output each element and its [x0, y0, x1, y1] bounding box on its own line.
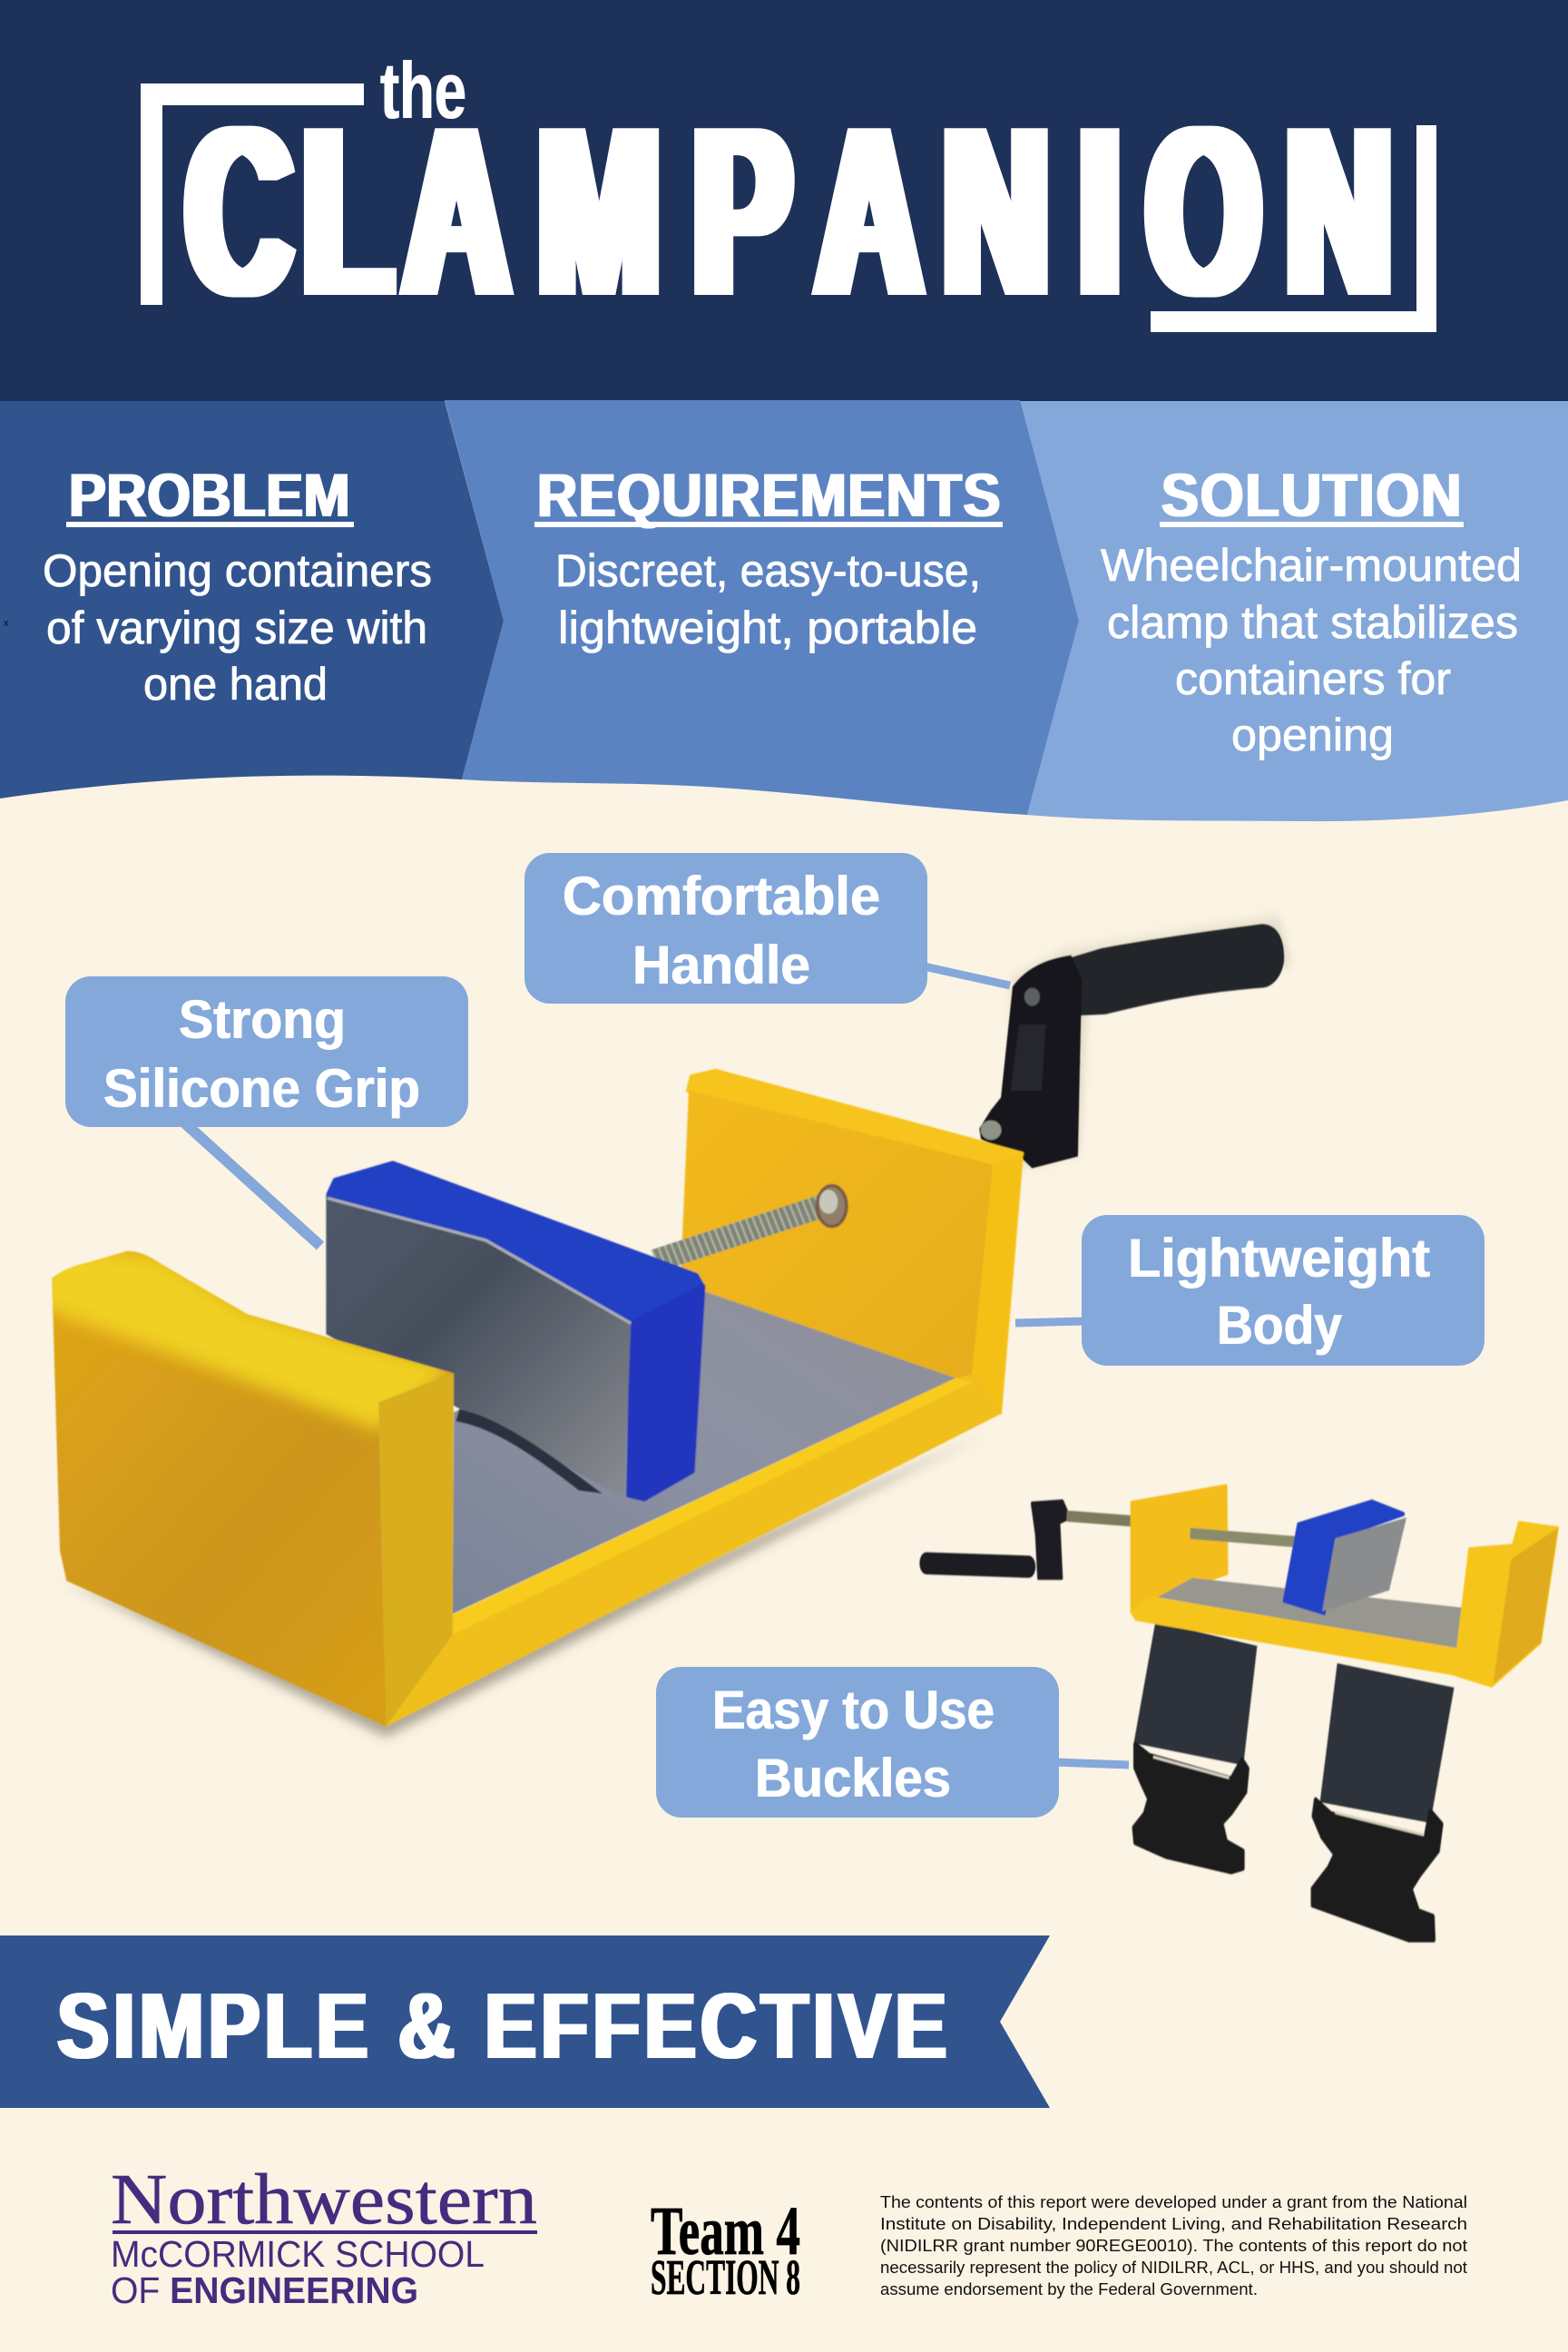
title: Clampanion: CLAMPANION — [187, 76, 1391, 347]
logo: northwestern mccormick: OF ENGINEERING — [111, 2269, 418, 2311]
callout: strong silicone grip: Strong — [179, 989, 346, 1050]
photo: clamp with buckles — [926, 1486, 1558, 1939]
small handle — [926, 1502, 1131, 1578]
logo: northwestern mccormick: Northwestern — [111, 2161, 537, 2239]
heading: solution: SOLUTION — [1161, 460, 1461, 530]
disclaimer: necessarily represent the policy of NIDILRR, ACL, or HHS, and you should not — [880, 2259, 1467, 2277]
photo: main clamp — [26, 1072, 1024, 1738]
disclaimer: Institute on Disability, Independent Living, and Rehabilitation Research — [880, 2215, 1467, 2233]
callout: lightweight body: Lightweight — [1128, 1228, 1430, 1289]
logo: northwestern mccormick: McCORMICK SCHOOL — [111, 2233, 485, 2275]
callout: easy to use buckles — [656, 1667, 1059, 1818]
heading: problem: PROBLEM — [69, 460, 350, 530]
problem text: one hand — [143, 659, 328, 710]
callout: easy to use buckles: Easy to Use — [712, 1680, 995, 1740]
disclaimer — [880, 2193, 1467, 2298]
title — [141, 47, 1436, 347]
connector: body — [1015, 1321, 1084, 1323]
connector: silicone grip — [185, 1123, 320, 1246]
title: the: the — [380, 47, 466, 136]
clamp near wall — [51, 1250, 456, 1727]
solution text: opening — [1231, 710, 1394, 760]
solution text: Wheelchair-mounted — [1101, 540, 1522, 591]
team label: SECTION 8 — [651, 2249, 800, 2305]
callout: lightweight body: Body — [1217, 1295, 1343, 1356]
small grip block — [1284, 1502, 1406, 1613]
header band — [0, 0, 1568, 401]
small far wall — [1132, 1486, 1227, 1612]
requirements text: lightweight, portable — [558, 603, 977, 653]
straps — [1134, 1622, 1454, 1823]
requirements text — [555, 545, 981, 653]
clamp far wall — [679, 1072, 1024, 1416]
problem text — [43, 545, 432, 710]
disclaimer: The contents of this report were developed under a grant from the National — [880, 2193, 1467, 2211]
callout: comfortable handle — [524, 853, 927, 1004]
title bracket: top left — [141, 83, 364, 305]
connector: handle — [924, 966, 1010, 985]
banner: simple and effective: SIMPLE & EFFECTIVE — [57, 1975, 946, 2079]
disclaimer: (NIDILRR grant number 90REGE0010). The contents of this report do not — [880, 2237, 1467, 2255]
threaded rod — [655, 1186, 847, 1260]
stray mark: x — [4, 618, 9, 629]
small floor — [1158, 1578, 1463, 1650]
disclaimer: assume endorsement by the Federal Government. — [880, 2280, 1258, 2298]
solution text: clamp that stabilizes — [1107, 597, 1518, 648]
connector: buckles — [1054, 1762, 1129, 1765]
photo: clamp handle — [979, 917, 1292, 1169]
clamp front base — [373, 1373, 1002, 1727]
panel: requirements — [445, 400, 1079, 815]
team label — [651, 2193, 800, 2305]
callout: easy to use buckles: Buckles — [755, 1748, 951, 1808]
heading: requirements: REQUIREMENTS — [537, 460, 1000, 530]
small rod — [1191, 1534, 1296, 1542]
logo: northwestern mccormick — [111, 2161, 537, 2311]
title bracket: bottom right — [1151, 125, 1436, 332]
shadow — [64, 1421, 1008, 1738]
solution text — [1101, 540, 1522, 760]
callout: lightweight body — [1082, 1215, 1485, 1366]
panel: problem — [0, 401, 504, 799]
callout: strong silicone grip — [65, 976, 468, 1127]
buckles — [1134, 1744, 1442, 1939]
callout: comfortable handle: Handle — [632, 935, 810, 995]
problem text: Opening containers — [43, 545, 432, 596]
requirements text: Discreet, easy-to-use, — [555, 545, 981, 596]
problem text: of varying size with — [46, 603, 427, 653]
silicone grip block — [326, 1163, 702, 1499]
panel: solution — [1020, 401, 1568, 821]
team label: Team 4 — [651, 2193, 800, 2269]
banner: simple and effective — [0, 1936, 1050, 2108]
clamp floor — [453, 1288, 956, 1614]
solution text: containers for — [1175, 653, 1451, 704]
callout: comfortable handle: Comfortable — [563, 866, 880, 926]
small clamp body — [1131, 1523, 1558, 1686]
callout: strong silicone grip: Silicone Grip — [103, 1058, 420, 1119]
